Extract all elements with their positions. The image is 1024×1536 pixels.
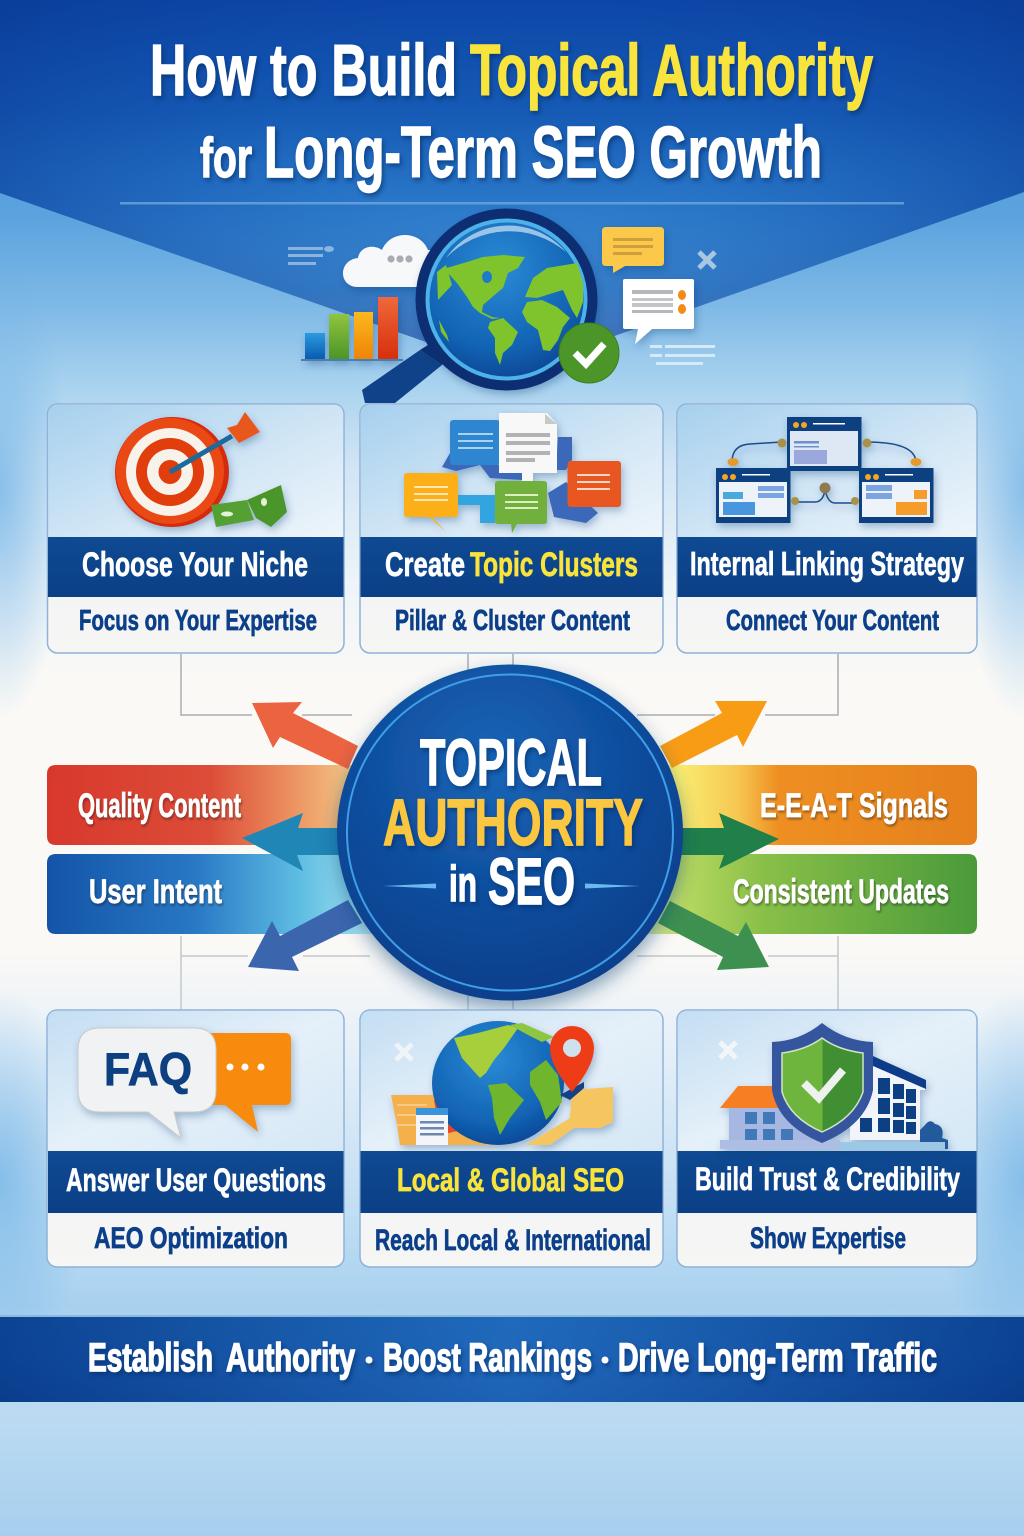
card: Answer User Questions xyxy=(47,1010,344,1267)
icon: cross mark xyxy=(699,252,715,268)
footer banner: Authority xyxy=(226,1336,356,1380)
arrow: green lower right xyxy=(658,901,769,970)
header background xyxy=(0,0,1024,372)
pill: User Intent: User Intent xyxy=(89,873,222,911)
icon: magnifier handle xyxy=(362,345,448,403)
heading xyxy=(385,546,638,584)
arrow: green right xyxy=(680,813,779,869)
pill: Quality Content xyxy=(47,765,375,845)
arrow: blue left xyxy=(242,813,340,871)
central circle: Topical Authority in SEO xyxy=(337,664,683,1000)
card: Local & Global SEO xyxy=(360,1010,663,1267)
icon: FAQ speech bubbles: FAQ xyxy=(104,1043,192,1095)
footer banner xyxy=(0,1315,1024,1402)
icon: topic cluster bubbles xyxy=(404,413,621,533)
icon: grey text lines left xyxy=(288,246,334,265)
heading: Create xyxy=(385,546,465,584)
pill: E-E-A-T Signals xyxy=(645,765,977,845)
icon: FAQ speech bubbles xyxy=(78,1028,291,1138)
hero illustration: magnifying glass over globe xyxy=(288,208,715,403)
title: for xyxy=(200,126,252,189)
card: Build Trust & Credibility xyxy=(677,1010,977,1267)
icon: cross mark xyxy=(396,1044,412,1060)
pill: Consistent Updates xyxy=(645,854,977,934)
icon: cloud xyxy=(343,235,440,287)
icon: cloud dots xyxy=(387,255,413,263)
card: Internal Linking Strategy xyxy=(677,404,977,653)
title: How to Build xyxy=(150,31,457,111)
arrow: red upper left xyxy=(252,702,358,769)
arrow: dark blue lower left xyxy=(248,900,362,971)
subheading: Pillar & Cluster Content xyxy=(395,605,630,637)
bar chart xyxy=(301,297,403,361)
subheading: Show Expertise xyxy=(750,1222,906,1255)
central circle: Topical Authority in SEO: AUTHORITY xyxy=(383,785,643,859)
footer banner: Establish xyxy=(88,1336,213,1380)
card: Create Topic Clusters xyxy=(360,404,663,653)
icon: white speech bubble xyxy=(623,279,694,344)
central circle: Topical Authority in SEO: TOPICAL xyxy=(420,725,602,799)
subheading: Reach Local & International xyxy=(375,1224,651,1257)
footer banner: Boost Rankings xyxy=(383,1336,592,1380)
icon: magnifier lens xyxy=(416,208,598,390)
heading: Answer User Questions xyxy=(66,1162,326,1198)
subheading: Connect Your Content xyxy=(726,605,939,637)
central circle: Topical Authority in SEO: SEO xyxy=(488,844,575,918)
subheading: Focus on Your Expertise xyxy=(79,605,317,637)
pill: E-E-A-T Signals: E-E-A-T Signals xyxy=(760,787,948,825)
icon: continents xyxy=(437,255,583,365)
icon: yellow speech bubble xyxy=(602,227,664,273)
icon: target with arrow xyxy=(115,412,287,527)
icon: light lines right xyxy=(650,345,715,365)
icon: shield with buildings xyxy=(720,1023,948,1150)
central circle: Topical Authority in SEO: in xyxy=(449,856,477,912)
connector lines xyxy=(181,654,838,1010)
background side tints xyxy=(0,260,1024,1370)
icon: check badge xyxy=(559,323,619,383)
icon: linked browser windows xyxy=(716,417,934,523)
icon: cross mark xyxy=(720,1042,736,1058)
title xyxy=(150,31,873,193)
heading: Topic Clusters xyxy=(470,546,638,584)
pill: Quality Content: Quality Content xyxy=(78,787,241,825)
pill: User Intent xyxy=(47,854,375,934)
card: Choose Your Niche xyxy=(48,404,344,653)
icon: globe with map pin and documents xyxy=(391,1021,613,1145)
subheading: AEO Optimization xyxy=(94,1222,288,1255)
arrow: orange upper right xyxy=(660,701,767,768)
heading: Local & Global SEO xyxy=(397,1162,624,1198)
heading: Choose Your Niche xyxy=(82,546,308,584)
